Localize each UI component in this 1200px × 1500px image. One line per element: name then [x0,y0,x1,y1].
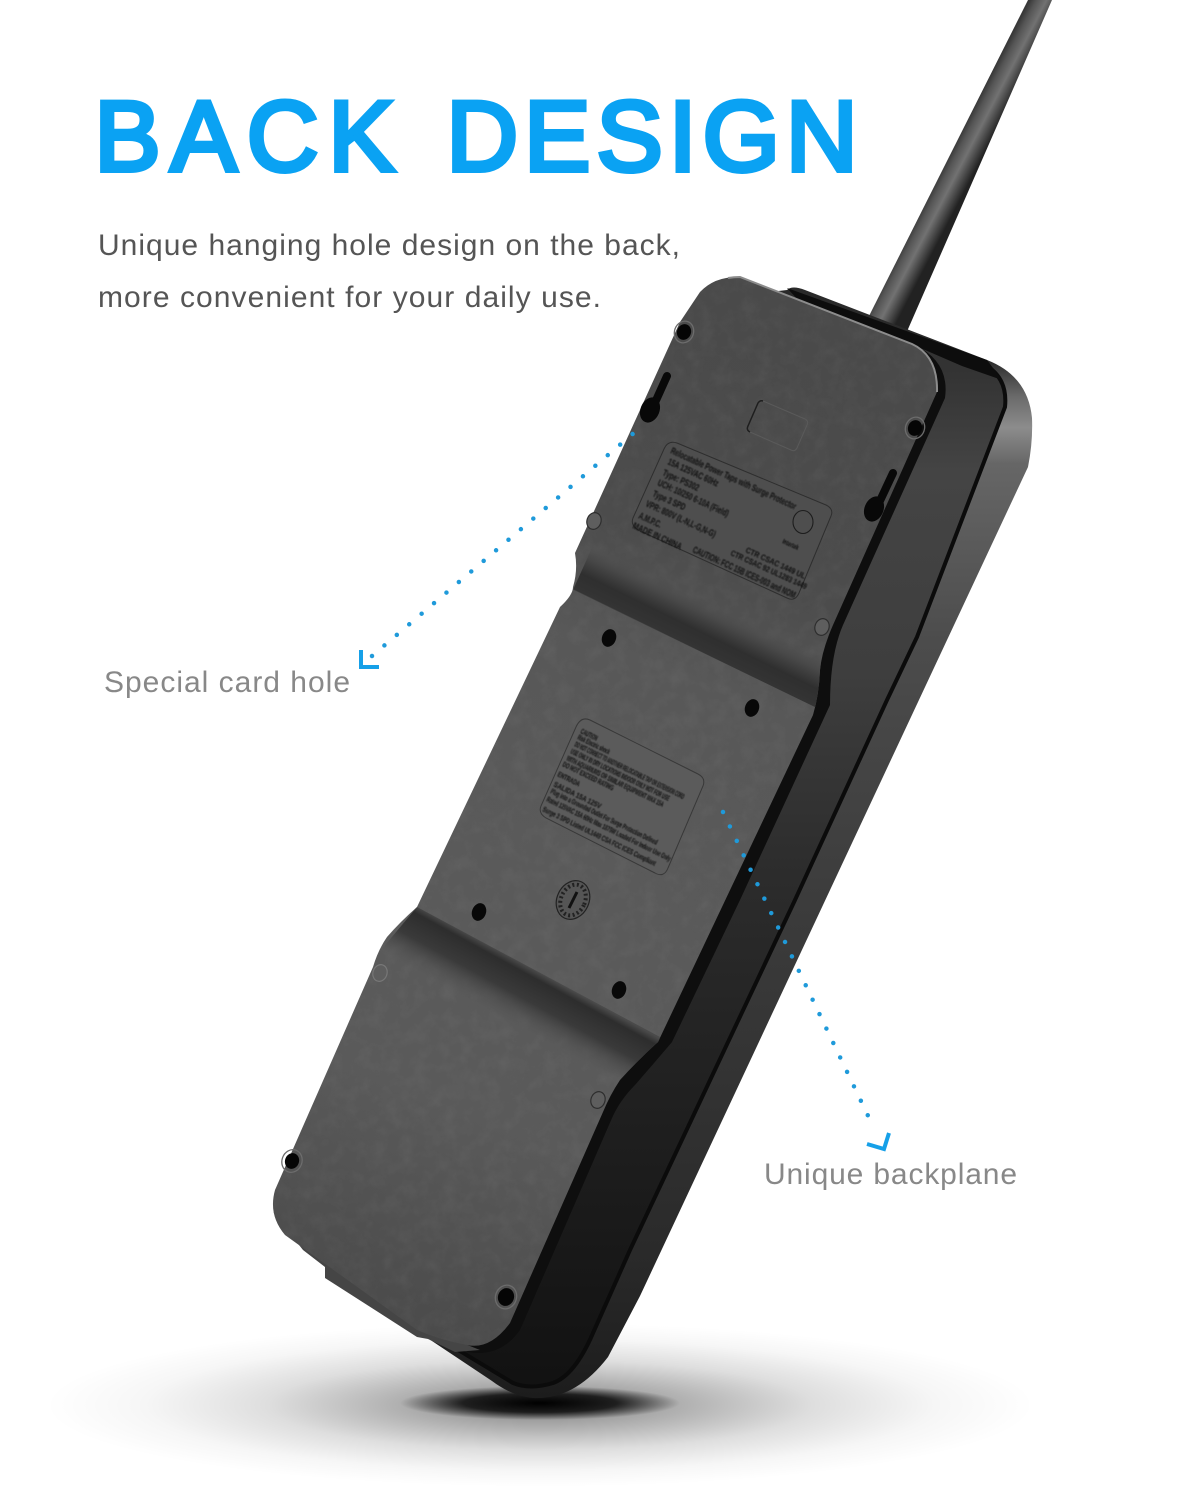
callout: special card hole [104,426,642,699]
caution label text [541,727,686,868]
upper shoulder shading [574,558,820,707]
infographic canvas [100,0,1052,1472]
title: BACK [94,80,394,192]
title [94,80,858,192]
back plate [273,277,937,1346]
rating label text: Relocatable Power Taps with Surge Protector [669,446,798,513]
caution label: DO NOT CONNECT TO ANOTHER RELOCATABLE TAP OR EXTENSION CORD [573,740,686,801]
date code medallion [550,875,596,925]
arrow: dotted leader [723,812,871,1122]
caution label text: DO NOT EXCEED RATING [561,760,616,792]
rating label text: 15A 125VAC 60Hz [666,457,720,490]
caution label text: USE ONLY IN DRY LOCATIONS INDOOR ONLY NOT FOR USE [569,747,671,803]
caution label text: ENTRADA [556,770,582,789]
description text: more convenient for your daily use. [98,281,601,314]
arrow: dotted leader [372,426,642,656]
certification mark [793,510,813,534]
rating label text: A.M.P.C. [637,511,663,531]
lower shoulder shading [389,907,660,1072]
side wall with inner line [450,296,1005,1386]
plate black rim [467,345,946,1353]
bottom ledge [273,1212,480,1352]
rating label text: VPR: 800V (L-N,L-G,N-G) [644,499,717,540]
icon: keyhole left [636,376,667,426]
rating label [631,442,832,601]
callout: unique backplane [723,812,1017,1191]
screw holes with rings [279,318,928,1312]
caution label text: Rated 125VAC 15A 60Hz Max 1875W Loaded For Indoor Use Only [545,795,673,863]
rating label text: UCH: 10/250 6-10A (Field) [656,478,730,520]
power strip device [260,270,1032,1398]
outer body shell [420,288,1032,1398]
caution label text: Surge 3 SPD Listed UL1449 CSA FCC ICES Compliant [541,805,658,868]
description text: Unique hanging hole design on the back, [98,229,680,262]
label: Unique backplane [764,1158,1017,1191]
title: DESIGN [446,80,858,192]
label: Special card hole [104,666,350,699]
rating label text: MADE IN CHINA [631,521,684,553]
rating label text: CAUTION: FCC 15B ICES-003 and NOM [691,545,797,601]
top black stripe [787,288,1002,380]
rating label text: Type: PS302 [661,468,701,494]
caution label text: Plug into a Grounded Outlet For Surge Protection Defined [549,787,659,847]
caution label text: Risk Electric shock [576,733,612,756]
card indentation [747,401,808,451]
rating label text: CTR CSAC 92 UL1283 1449 [729,549,809,591]
description text [98,229,680,314]
mounting holes [469,627,762,1001]
rating label text: CTR CSAC 1449 UL [744,546,807,581]
plate top highlight edge [728,277,937,392]
rating label text: Intertek [781,538,800,552]
caution label [540,719,704,875]
plain bumps [371,511,831,1110]
floor shadow [45,1323,1035,1487]
rating label text: Type 3 SPD [651,489,687,513]
arrow head [867,1133,889,1149]
caution label text: CAUTION [579,727,599,743]
caution label text: SALIDA 15A 125V [552,780,603,811]
icon: keyhole right [860,473,893,525]
arrow head [361,650,379,667]
rating label text [631,446,809,601]
plate shoulders and surface [389,558,820,1072]
caution label text: WITH AQUARIUMS OR SIMILAR EQUIPMENT MAX 15A [565,754,666,809]
power cord [866,0,1052,336]
